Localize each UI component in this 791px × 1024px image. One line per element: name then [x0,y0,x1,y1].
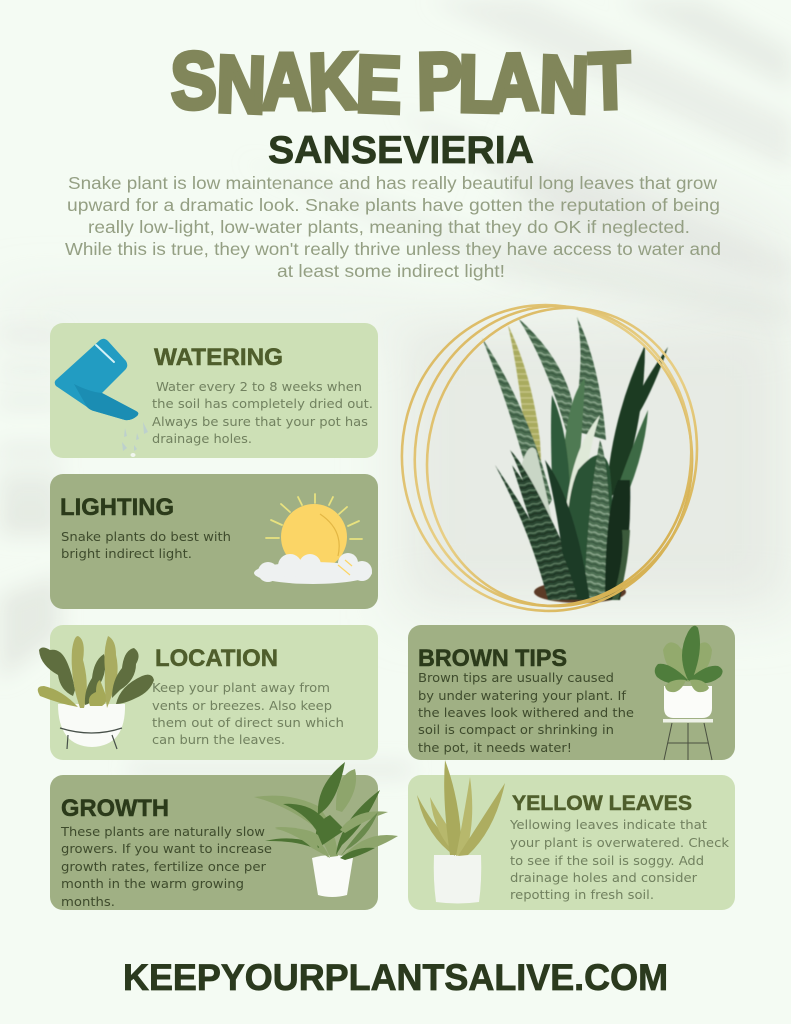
text: yellow leaves: to see if the soil is soggy. Add [510,853,704,868]
gold ring [387,279,728,635]
panel: location [38,625,378,760]
text: growth: growers. If you want to increase [61,841,272,856]
heading: brown tips: BROWN TIPS [418,645,567,672]
text: watering: Always be sure that your pot has [152,414,368,429]
text: location [152,680,344,747]
panel: watering [50,323,378,458]
snake plant photo [482,317,668,603]
panel: yellow leaves [408,760,735,910]
intro paragraph: Snake plant is low maintenance and has really beautiful long leaves that grow [68,173,717,193]
text: yellow leaves: Yellowing leaves indicate that [509,817,707,832]
icon: sun and cloud [254,494,372,584]
title: SNAKE PLANT [170,35,632,130]
panel: brown tips [408,625,735,760]
text: brown tips: Brown tips are usually caused [418,670,614,685]
heading: location: LOCATION [155,645,278,672]
panel: lighting [50,474,378,609]
plant leaves [482,317,668,600]
text: brown tips: by under watering your plant. If [418,688,627,703]
text: watering: drainage holes. [152,431,252,446]
text: growth: month in the warm growing [61,876,244,891]
text: yellow leaves: repotting in fresh soil. [510,887,654,902]
text: yellow leaves [509,817,730,902]
text: growth: growth rates, fertilize once per [61,859,267,874]
text: yellow leaves: your plant is overwatered. Check [510,835,730,850]
text: growth: These plants are naturally slow [60,824,265,839]
text: brown tips [418,670,634,755]
icon: aloe plant [417,760,505,904]
text: yellow leaves: drainage holes and consider [510,870,698,885]
intro paragraph [65,173,721,281]
icon: potted plant [254,762,398,897]
heading: growth: GROWTH [61,795,169,822]
icon: bowl plant [38,636,154,749]
intro paragraph: really low-light, low-water plants, meaning that they do OK if neglected. [88,217,690,237]
text: lighting: Snake plants do best with [61,529,231,544]
text: location: can burn the leaves. [152,732,285,747]
intro paragraph: upward for a dramatic look. Snake plants have gotten the reputation of being [67,195,720,215]
intro paragraph: at least some indirect light! [277,261,505,281]
icon: watering can [55,339,148,457]
text: brown tips: the pot, it needs water! [418,740,572,755]
text: watering [152,379,373,446]
text: lighting [61,529,231,561]
intro paragraph: While this is true, they won't really thrive unless they have access to water and [65,239,721,259]
text: location: vents or breezes. Also keep [152,698,332,713]
text: watering: Water every 2 to 8 weeks when [156,379,362,394]
heading: watering: WATERING [154,344,283,371]
text: lighting: bright indirect light. [61,546,192,561]
text: brown tips: soil is compact or shrinking in [418,722,614,737]
text: watering: the soil has completely dried out. [152,396,373,411]
text: brown tips: the leaves look withered and the [418,705,634,720]
website footer: KEEPYOURPLANTSALIVE.COM [123,957,668,998]
panel: growth [50,762,398,910]
plant pot soil [534,581,626,603]
subtitle: SANSEVIERIA [268,129,534,172]
icon: plant on stand [655,626,723,760]
text: location: Keep your plant away from [152,680,330,695]
text: growth: months. [61,894,115,909]
text: location: them out of direct sun which [152,715,344,730]
text: growth [60,824,272,909]
heading: lighting: LIGHTING [60,494,174,521]
heading: yellow leaves: YELLOW LEAVES [512,791,692,815]
